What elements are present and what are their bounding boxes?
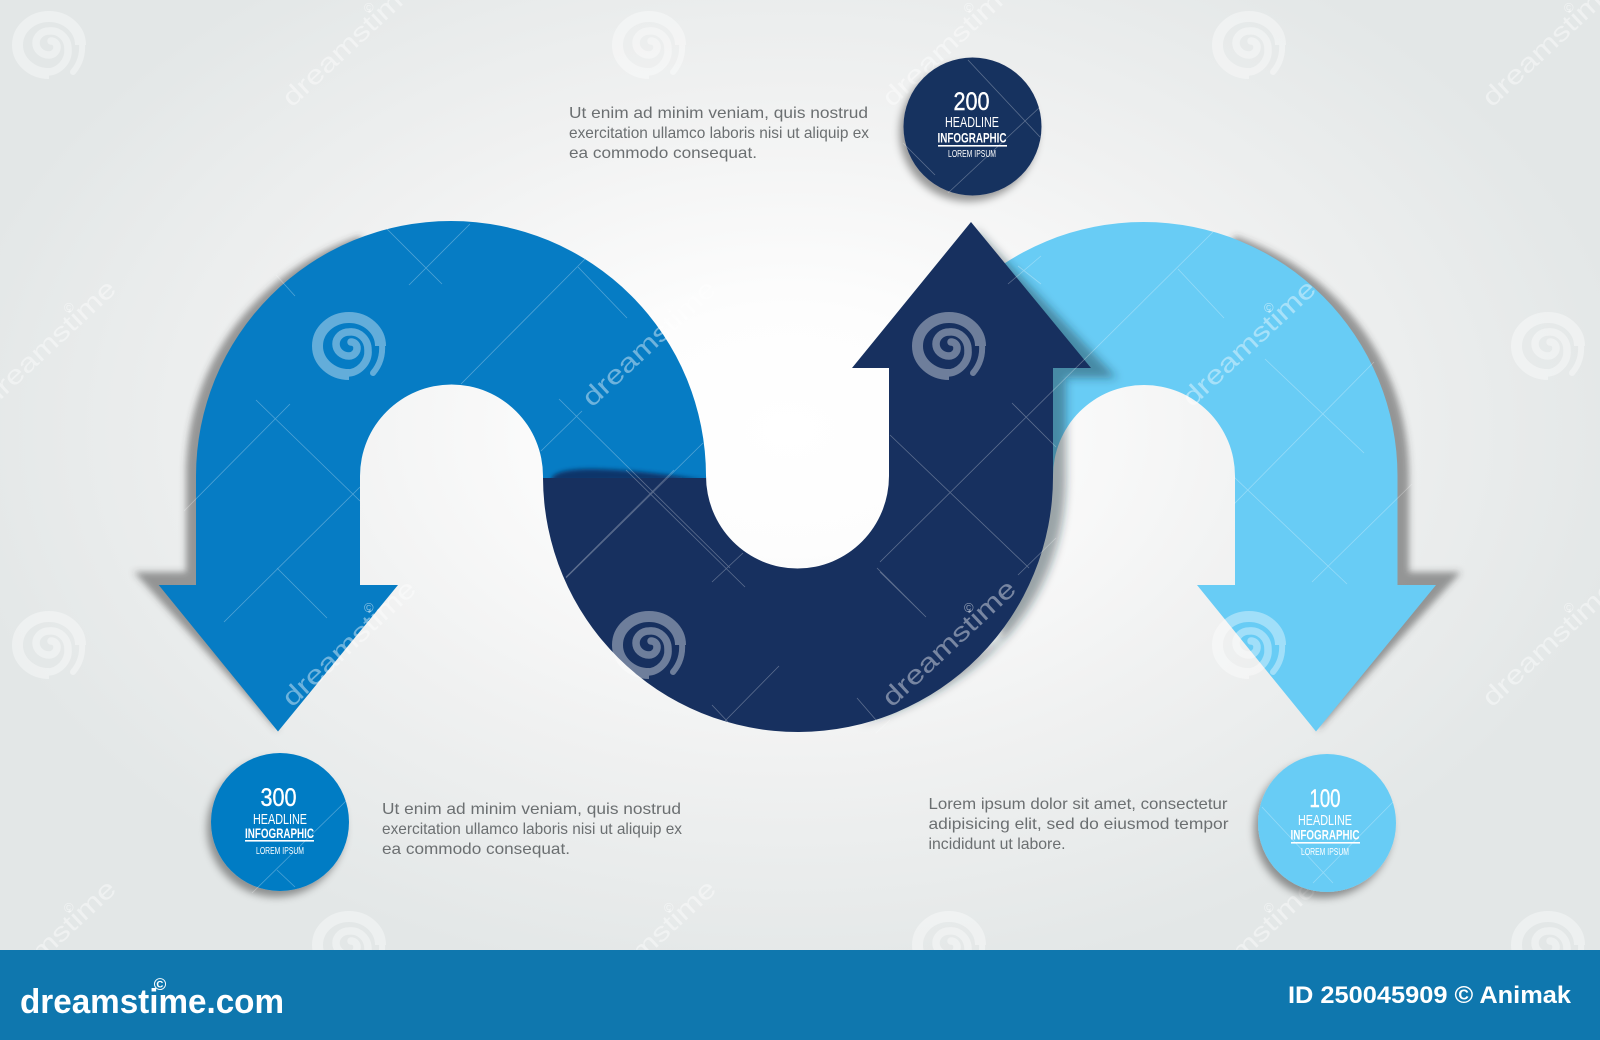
badge text 300: 300 — [260, 784, 296, 812]
watermark: dreamstime text: dreamstime — [276, 573, 422, 712]
text block: bottom right: incididunt ut labore. — [928, 836, 1066, 853]
watermark: dreamstime text: © — [1264, 900, 1274, 915]
watermark: dreamstime text: dreamstime — [876, 573, 1022, 712]
text block: bottom right — [928, 796, 1229, 853]
badge text 100: HEADLINE — [1298, 812, 1352, 829]
badge circle 300 — [211, 753, 349, 891]
text block: bottom right: Lorem ipsum dolor sit amet, consectetur — [928, 796, 1228, 813]
badge text 100: LOREM IPSUM — [1301, 847, 1349, 858]
watermark: dreamstime text: © — [364, 0, 374, 15]
watermark: dreamstime text: © — [1564, 0, 1574, 15]
badge text 200: LOREM IPSUM — [948, 149, 996, 160]
watermark: dreamstime text: © — [964, 0, 974, 15]
badge text 100: INFOGRAPHIC — [1290, 826, 1360, 842]
arrow: navy centre U-shaped up arrow — [543, 222, 1091, 732]
footer image id and credit: ID 250045909 © Animak — [1288, 982, 1572, 1009]
watermark: dreamstime text: © — [364, 600, 374, 615]
text block: top centre: Ut enim ad minim veniam, quis nostrud — [569, 105, 868, 122]
text block: top centre: exercitation ullamco laboris nisi ut aliquip ex — [569, 125, 869, 142]
shadow: navy centre arrow — [860, 228, 1117, 724]
watermark: dreamstime text: © — [64, 300, 74, 315]
arrow: right light blue curved down arrow — [890, 222, 1436, 731]
watermark: dreamstime text: © — [664, 900, 674, 915]
watermark: dreamstime text: dreamstime — [1176, 873, 1322, 1012]
shadow: fold between blue and navy — [551, 469, 706, 482]
badge text 300: LOREM IPSUM — [256, 846, 304, 857]
shadow: left arrow — [134, 236, 400, 731]
text block: bottom left: ea commodo consequat. — [382, 841, 570, 858]
badge watermark lines 100 — [1262, 802, 1393, 883]
text block: bottom left — [382, 801, 682, 858]
watermark: dreamstime text: dreamstime — [876, 0, 1022, 112]
watermark: dreamstime text: © — [1564, 600, 1574, 615]
watermark: dreamstime text: © — [1264, 300, 1274, 315]
watermark: dreamstime text: dreamstime — [1176, 273, 1322, 412]
watermark: dreamstime text: © — [964, 600, 974, 615]
badge circle 200 — [904, 58, 1042, 196]
badge text 300: INFOGRAPHIC — [245, 825, 314, 841]
badge: 300 — [211, 753, 349, 893]
arrow: left blue curved down arrow — [159, 221, 706, 732]
badge text 300 — [245, 784, 314, 857]
badge text 100: 100 — [1310, 785, 1340, 813]
watermark: thin diagonal lines — [184, 224, 1412, 733]
badge text 100 — [1290, 785, 1360, 858]
watermark: dreamstime text: dreamstime — [1476, 0, 1600, 112]
badge watermark lines 300 — [252, 800, 347, 893]
watermark: dreamstime text: dreamstime — [576, 273, 722, 412]
footer band — [0, 950, 1600, 1040]
badge text 200: HEADLINE — [945, 114, 999, 131]
watermark: dreamstime text: dreamstime — [1476, 573, 1600, 712]
badge watermark lines 200 — [903, 60, 1040, 193]
text block: top centre — [569, 105, 869, 162]
footer logo: © — [154, 975, 167, 994]
text block: bottom left: exercitation ullamco laboris nisi ut aliquip ex — [382, 821, 682, 838]
badge text 300: HEADLINE — [253, 811, 307, 828]
watermark: dreamstime text: © — [664, 300, 674, 315]
watermark: dreamstime text: dreamstime — [576, 873, 722, 1012]
shadow: right arrow — [1195, 236, 1461, 731]
badge text 200 — [938, 88, 1007, 160]
badge: 200 — [903, 58, 1042, 196]
footer logo: dreamstime.com — [20, 983, 284, 1021]
text block: top centre: ea commodo consequat. — [569, 145, 757, 162]
text block: bottom left: Ut enim ad minim veniam, quis nostrud — [382, 801, 681, 818]
text block: bottom right: adipisicing elit, sed do eiusmod tempor — [928, 816, 1229, 833]
badge text 200: INFOGRAPHIC — [938, 130, 1006, 146]
badge: 100 — [1258, 754, 1396, 892]
watermark: dreamstime text: © — [64, 900, 74, 915]
badge circle 100 — [1258, 754, 1396, 892]
badge text 200: 200 — [954, 88, 990, 116]
watermark: dreamstime text: dreamstime — [276, 0, 422, 112]
